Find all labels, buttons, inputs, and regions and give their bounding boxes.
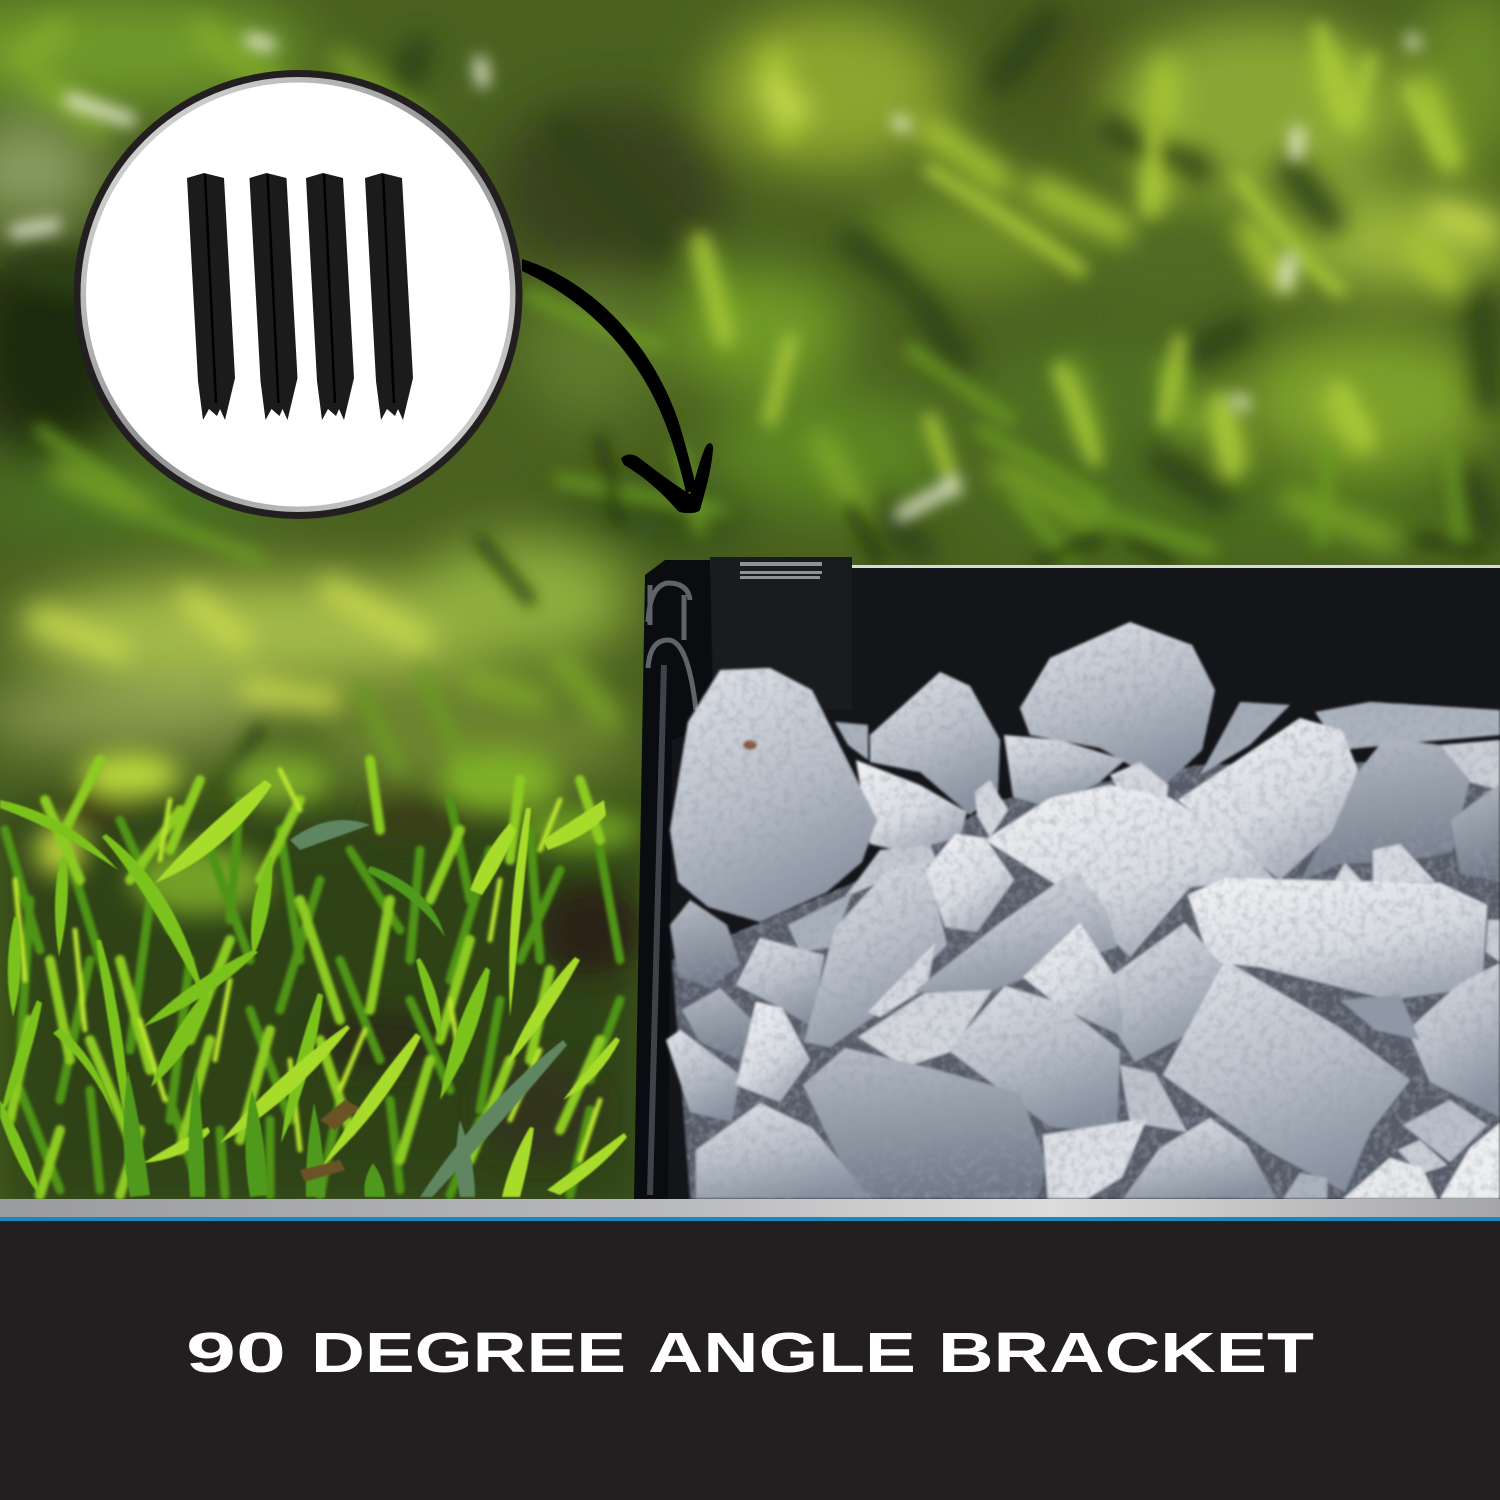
post highlight curves xyxy=(648,583,696,710)
corner post xyxy=(634,560,712,1199)
corner bracket strap xyxy=(710,557,852,710)
rock bed base xyxy=(672,760,1500,1199)
bracket hinge lines xyxy=(740,562,822,579)
caption: DEGREE xyxy=(311,1321,626,1385)
rock cluster: front row xyxy=(666,960,1500,1199)
caption: 90 xyxy=(186,1321,286,1385)
raised bed edging with bracket xyxy=(634,557,1500,1199)
stake 2 xyxy=(250,173,298,420)
white rocks xyxy=(666,622,1500,1199)
blue accent line xyxy=(0,1217,1500,1221)
stake 4 xyxy=(365,173,413,420)
post highlight edge xyxy=(650,665,664,1195)
caption band xyxy=(0,1221,1500,1500)
panel rim highlight xyxy=(850,565,1500,568)
rock cluster: middle row xyxy=(670,785,1500,1064)
mid-focus grass blades xyxy=(15,30,1480,790)
large foreground rock xyxy=(670,668,877,922)
caption xyxy=(186,1321,1314,1385)
soft lit grass clumps behind foreground xyxy=(35,750,640,1160)
bed back panel xyxy=(640,568,1500,1199)
rust spot xyxy=(743,740,757,750)
rock cluster: back row xyxy=(835,622,1500,882)
circular inset with four stakes xyxy=(74,70,522,519)
sharp foreground grass blades xyxy=(0,780,627,1197)
stake 1 xyxy=(187,173,235,420)
inset white disc xyxy=(86,82,510,506)
inset silver ring xyxy=(80,77,516,512)
arrow: inset pointing to the bracket xyxy=(522,259,713,513)
caption: ANGLE xyxy=(648,1321,916,1385)
dense mid-ground grass blades xyxy=(5,760,620,1195)
silver divider strip xyxy=(0,1199,1500,1217)
stake 3 xyxy=(306,173,354,420)
out-of-focus grass blades xyxy=(20,20,1490,720)
inset outer black ring xyxy=(74,70,522,519)
caption: BRACKET xyxy=(938,1321,1314,1385)
